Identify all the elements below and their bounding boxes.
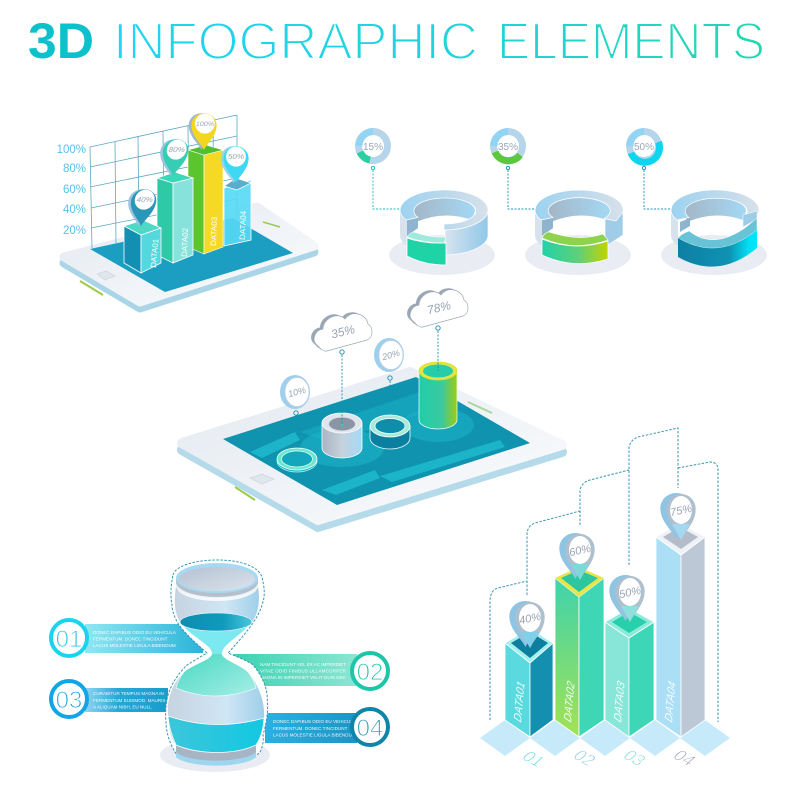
pin 80% [158, 139, 189, 176]
bar 03 [605, 608, 654, 737]
category labels: 04 [669, 747, 701, 769]
label bar 01: FERMENTUM. DONEC TINCIDUNT [93, 636, 168, 642]
label bar 01: 01 [56, 626, 82, 653]
panel: hourglass [51, 560, 388, 772]
label bar 02: 02 [357, 659, 383, 686]
hourglass shadow [160, 738, 270, 772]
label bar 02: NAM TINCIDUNT VEL EX AC IMPERDIET [260, 662, 346, 667]
base tiles [480, 720, 730, 756]
dashed cut outline [166, 560, 268, 765]
bar 02 [555, 567, 604, 737]
bar DATA03 [188, 145, 223, 254]
category labels: 01 [518, 748, 550, 770]
donut 15% [358, 132, 388, 160]
bar DATA04 [224, 178, 251, 246]
bar 04 [656, 523, 705, 737]
title: 3D [28, 13, 94, 69]
bar DATA04: DATA04 [238, 210, 248, 240]
dashed connectors [490, 428, 718, 722]
bar 04: DATA04 [664, 679, 678, 724]
donut 15%: 15% [363, 142, 383, 153]
pin 50% [609, 575, 645, 622]
axis labels: 20% [63, 225, 86, 237]
axis labels: 80% [63, 163, 86, 175]
green cylinder 78% [419, 362, 457, 429]
label bar 03: FERMENTUM EUISMOD. MAURIS [93, 698, 165, 703]
badge 20% [374, 338, 404, 372]
axis labels: 100% [57, 144, 86, 156]
hourglass lower bulb [168, 653, 264, 752]
panel: isometric bar chart [480, 428, 730, 770]
donut 50% [630, 132, 660, 162]
ring 10% [277, 448, 317, 472]
label bar 01 [51, 620, 203, 656]
ring 20% [370, 415, 410, 449]
panel: ring charts [358, 132, 767, 275]
connector 15% [371, 166, 409, 211]
bar DATA03: DATA03 [209, 216, 219, 246]
cloud 78% [407, 288, 468, 327]
tablet buttons [235, 402, 492, 500]
badge 20%: 20% [380, 348, 401, 362]
axis labels: 40% [63, 204, 86, 216]
label bar 02: VITAE ODIO FINIBUS ULLAMCORPER [260, 668, 347, 674]
screen decoration [250, 392, 505, 495]
category labels: 02 [569, 747, 601, 769]
badge 10%: 10% [287, 385, 307, 399]
cloud 35%: 35% [330, 322, 357, 341]
hourglass upper bulb [175, 563, 259, 653]
pin 50%: 50% [618, 585, 642, 601]
phone body [64, 207, 314, 308]
phone buttons [80, 222, 280, 295]
label bar 04 [265, 709, 388, 745]
bar 01: DATA01 [513, 679, 527, 724]
pin 60%: 60% [568, 543, 592, 559]
category labels: 03 [619, 747, 651, 769]
hourglass lower base [176, 738, 256, 766]
connector 35% [506, 166, 544, 211]
ring 3: 50% segment [661, 190, 767, 275]
tablet body [182, 372, 562, 527]
pin 60% [559, 533, 595, 580]
label bar 04: DONEC DAPIBUS ODIO EU VEHICULA [273, 719, 357, 724]
label bar 01: DONEC DAPIBUS ODIO EU VEHICULA [93, 630, 177, 635]
title [28, 13, 765, 71]
bar 02: DATA02 [563, 679, 577, 724]
axis labels: 60% [63, 184, 86, 196]
pin 40% [509, 601, 545, 648]
bar DATA01: DATA01 [149, 238, 161, 268]
pin 40% [126, 189, 157, 226]
bar DATA01 [124, 220, 161, 273]
pin 75% [660, 493, 696, 540]
phone screen [90, 218, 293, 292]
label bar 03: A ALIQUAM NIBH, EU NULL [93, 704, 152, 710]
ring 2: 35% segment [525, 190, 631, 275]
pin 100%: 100% [196, 121, 214, 128]
label bar 04: FERMENTUM. DONEC TINCIDUNT [273, 726, 348, 731]
cloud 35% [311, 312, 372, 351]
pin 40%: 40% [136, 195, 153, 204]
pin 80%: 80% [168, 145, 185, 154]
cloud 78%: 78% [426, 298, 453, 317]
connector 50% [642, 166, 680, 211]
label bar 01: LACUS MOLESTIE LIGULA BIBENDUM [93, 643, 176, 648]
panel: smartphone bar chart [57, 113, 314, 308]
bar 01 [505, 628, 553, 737]
category labels [518, 747, 701, 770]
axis labels [57, 144, 86, 237]
pin 50% [221, 146, 249, 183]
pin 75%: 75% [669, 503, 693, 519]
ring 1: 15% segment [389, 190, 495, 275]
connectors [294, 326, 440, 424]
pin 40%: 40% [518, 611, 542, 627]
label bar 03: 03 [56, 687, 82, 714]
gray cylinder 35% [322, 413, 362, 458]
pin 100% [189, 113, 217, 150]
grid [90, 115, 237, 248]
badge 10% [280, 375, 310, 409]
label bar 03 [51, 681, 168, 717]
label bar 02: MAGNA IN IMPERDIET VELIT DUIS NEC [260, 675, 347, 680]
bar DATA02 [157, 172, 193, 263]
title: INFOGRAPHIC [113, 13, 478, 71]
donut 35%: 35% [498, 142, 518, 153]
bar DATA02: DATA02 [180, 227, 190, 257]
tablet screen [223, 377, 530, 505]
label bar 04: 04 [357, 715, 383, 742]
donut 50%: 50% [634, 142, 654, 153]
panel: tablet with cylinders [182, 288, 562, 527]
pin 50%: 50% [228, 152, 244, 161]
bar 03: DATA03 [613, 679, 627, 724]
label bar 04: LACUS MOLESTIE LIGULA BIBENDUM [273, 732, 356, 738]
donut 35% [494, 132, 522, 161]
label bar 03: CURABITUR TEMPUS MAGNA IN [93, 691, 164, 696]
title: ELEMENTS [497, 13, 765, 71]
label bar 02 [233, 653, 388, 689]
